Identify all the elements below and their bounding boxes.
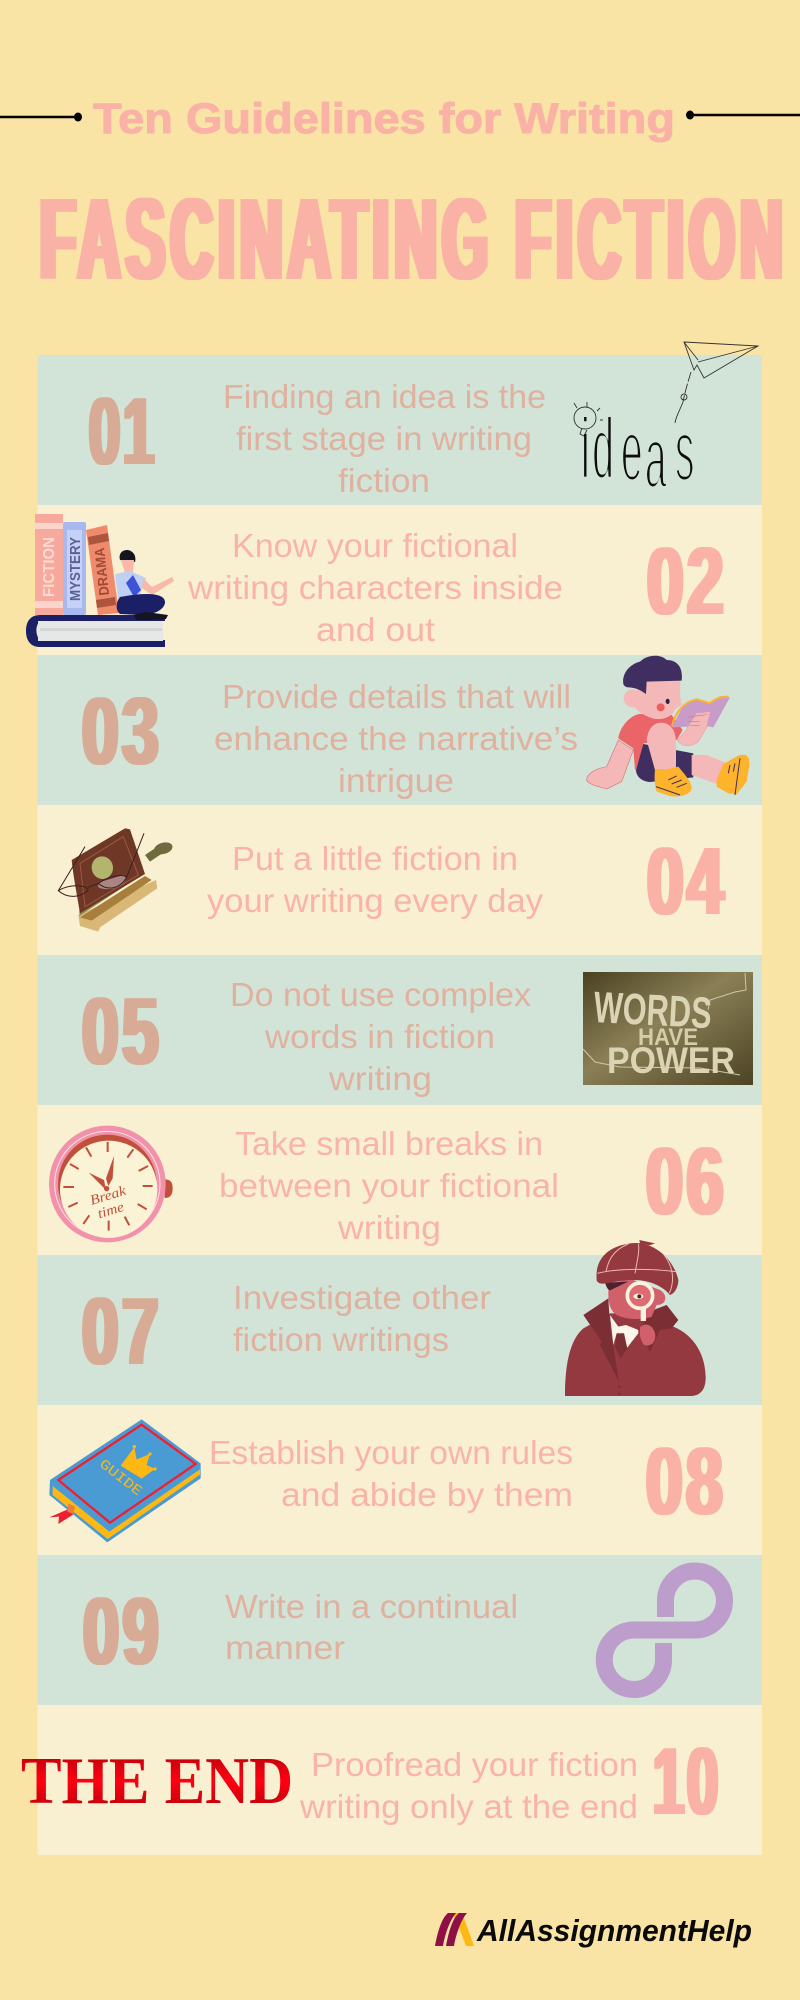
guideline text: Proofread your fiction <box>311 1746 638 1783</box>
icon: ideas doodle with paper plane and bulb: ideas <box>581 402 694 506</box>
image: words have power chalkboard: HAVE <box>638 1024 698 1051</box>
row background <box>38 1555 762 1705</box>
panel: guideline 01 <box>38 342 762 506</box>
icon: books with reader <box>26 514 174 647</box>
number 02: 02 <box>647 528 727 635</box>
row background <box>38 1405 762 1555</box>
icon: break time watch: Break <box>88 1183 129 1209</box>
row background <box>38 355 762 505</box>
guideline text <box>187 527 563 648</box>
guideline text <box>233 1279 491 1358</box>
guideline text: your writing every day <box>207 882 544 919</box>
guideline text: writing <box>337 1209 441 1246</box>
guideline text: intrigue <box>338 762 454 799</box>
guideline text: fiction writings <box>233 1321 449 1358</box>
row background <box>38 1105 762 1255</box>
panel: guideline 04 <box>38 805 762 955</box>
guideline text: writing characters inside <box>187 569 563 606</box>
header <box>0 95 800 304</box>
guideline text: fiction <box>338 462 430 499</box>
guideline text <box>299 1746 638 1825</box>
guideline text: words in fiction <box>264 1018 495 1055</box>
panel: guideline 08 <box>38 1405 762 1555</box>
guideline text: Put a little fiction in <box>232 840 518 877</box>
image: words have power chalkboard <box>583 972 753 1085</box>
guideline text: between your fictional <box>219 1167 559 1204</box>
guideline text <box>209 1434 573 1513</box>
guideline text <box>207 840 544 919</box>
icon: guide book with crown: GUIDE <box>96 1457 145 1500</box>
guideline text: Establish your own rules <box>209 1434 573 1471</box>
panel: guideline 03 <box>38 655 762 805</box>
panel: guideline 09 <box>38 1555 762 1705</box>
icon: infinity loop <box>604 1571 724 1690</box>
panel: guideline 06 <box>38 1105 762 1255</box>
right decorative line with dot <box>686 110 800 120</box>
guideline text <box>219 1125 559 1246</box>
row background <box>38 1255 762 1405</box>
row background <box>38 655 762 805</box>
image: words have power chalkboard: POWER <box>607 1040 735 1081</box>
row background <box>38 805 762 955</box>
guideline text: Investigate other <box>233 1279 491 1316</box>
guideline text: Do not use complex <box>230 976 532 1013</box>
number 01: 01 <box>89 378 157 485</box>
guideline text: enhance the narrative’s <box>214 720 578 757</box>
guideline text: Provide details that will <box>222 678 571 715</box>
guideline text: manner <box>225 1629 345 1666</box>
guideline text <box>225 1588 518 1666</box>
number 05: 05 <box>82 978 162 1085</box>
number 10: 10 <box>653 1728 721 1835</box>
guideline text: Write in a continual <box>225 1588 518 1625</box>
logo wordmark: AllAssignmentHelp <box>476 1913 752 1948</box>
number 09: 09 <box>83 1578 162 1685</box>
panel: guideline 07 <box>38 1240 762 1405</box>
logo: AllAssignmentHelp <box>435 1913 752 1948</box>
guideline text: writing <box>328 1060 432 1097</box>
image: words have power chalkboard: WORDS <box>592 983 713 1038</box>
left decorative line with dot <box>0 112 82 122</box>
icon: old book with glasses <box>58 828 174 932</box>
guideline text: first stage in writing <box>236 420 532 457</box>
icon: child reading a book <box>587 656 749 796</box>
number 04: 04 <box>647 828 727 935</box>
panel: guideline 05 <box>38 955 762 1105</box>
number 06: 06 <box>646 1128 727 1235</box>
icon: detective with magnifying glass <box>565 1240 706 1396</box>
row background <box>38 1705 762 1855</box>
icon: books with reader: DRAMA <box>91 547 112 596</box>
icon: ideas doodle with paper plane and bulb <box>574 342 758 506</box>
panel: guideline 10 <box>21 1705 762 1855</box>
number 08: 08 <box>646 1428 726 1535</box>
row background <box>38 955 762 1105</box>
row background <box>38 505 762 655</box>
subtitle: Ten Guidelines for Writing <box>93 95 675 143</box>
icon: break time watch <box>49 1126 173 1242</box>
guideline text: and abide by them <box>281 1476 573 1513</box>
guideline text: Know your fictional <box>232 527 518 564</box>
number 07: 07 <box>82 1278 162 1385</box>
guideline text <box>214 678 578 799</box>
panel: guideline 02 <box>26 505 762 655</box>
icon: guide book with crown <box>49 1419 201 1542</box>
logo mark <box>435 1913 474 1946</box>
guideline text: Finding an idea is the <box>223 378 546 415</box>
guideline text: Take small breaks in <box>235 1125 543 1162</box>
guideline text: writing only at the end <box>299 1788 638 1825</box>
guideline text: and out <box>316 611 435 648</box>
icon: books with reader: MYSTERY <box>67 537 84 601</box>
guideline text <box>223 378 546 499</box>
icon: break time watch: time <box>96 1200 126 1222</box>
guideline text <box>230 976 532 1097</box>
icon: books with reader: FICTION <box>41 537 58 597</box>
the end wordmark: THE END <box>21 1744 293 1818</box>
number 03: 03 <box>82 678 162 785</box>
